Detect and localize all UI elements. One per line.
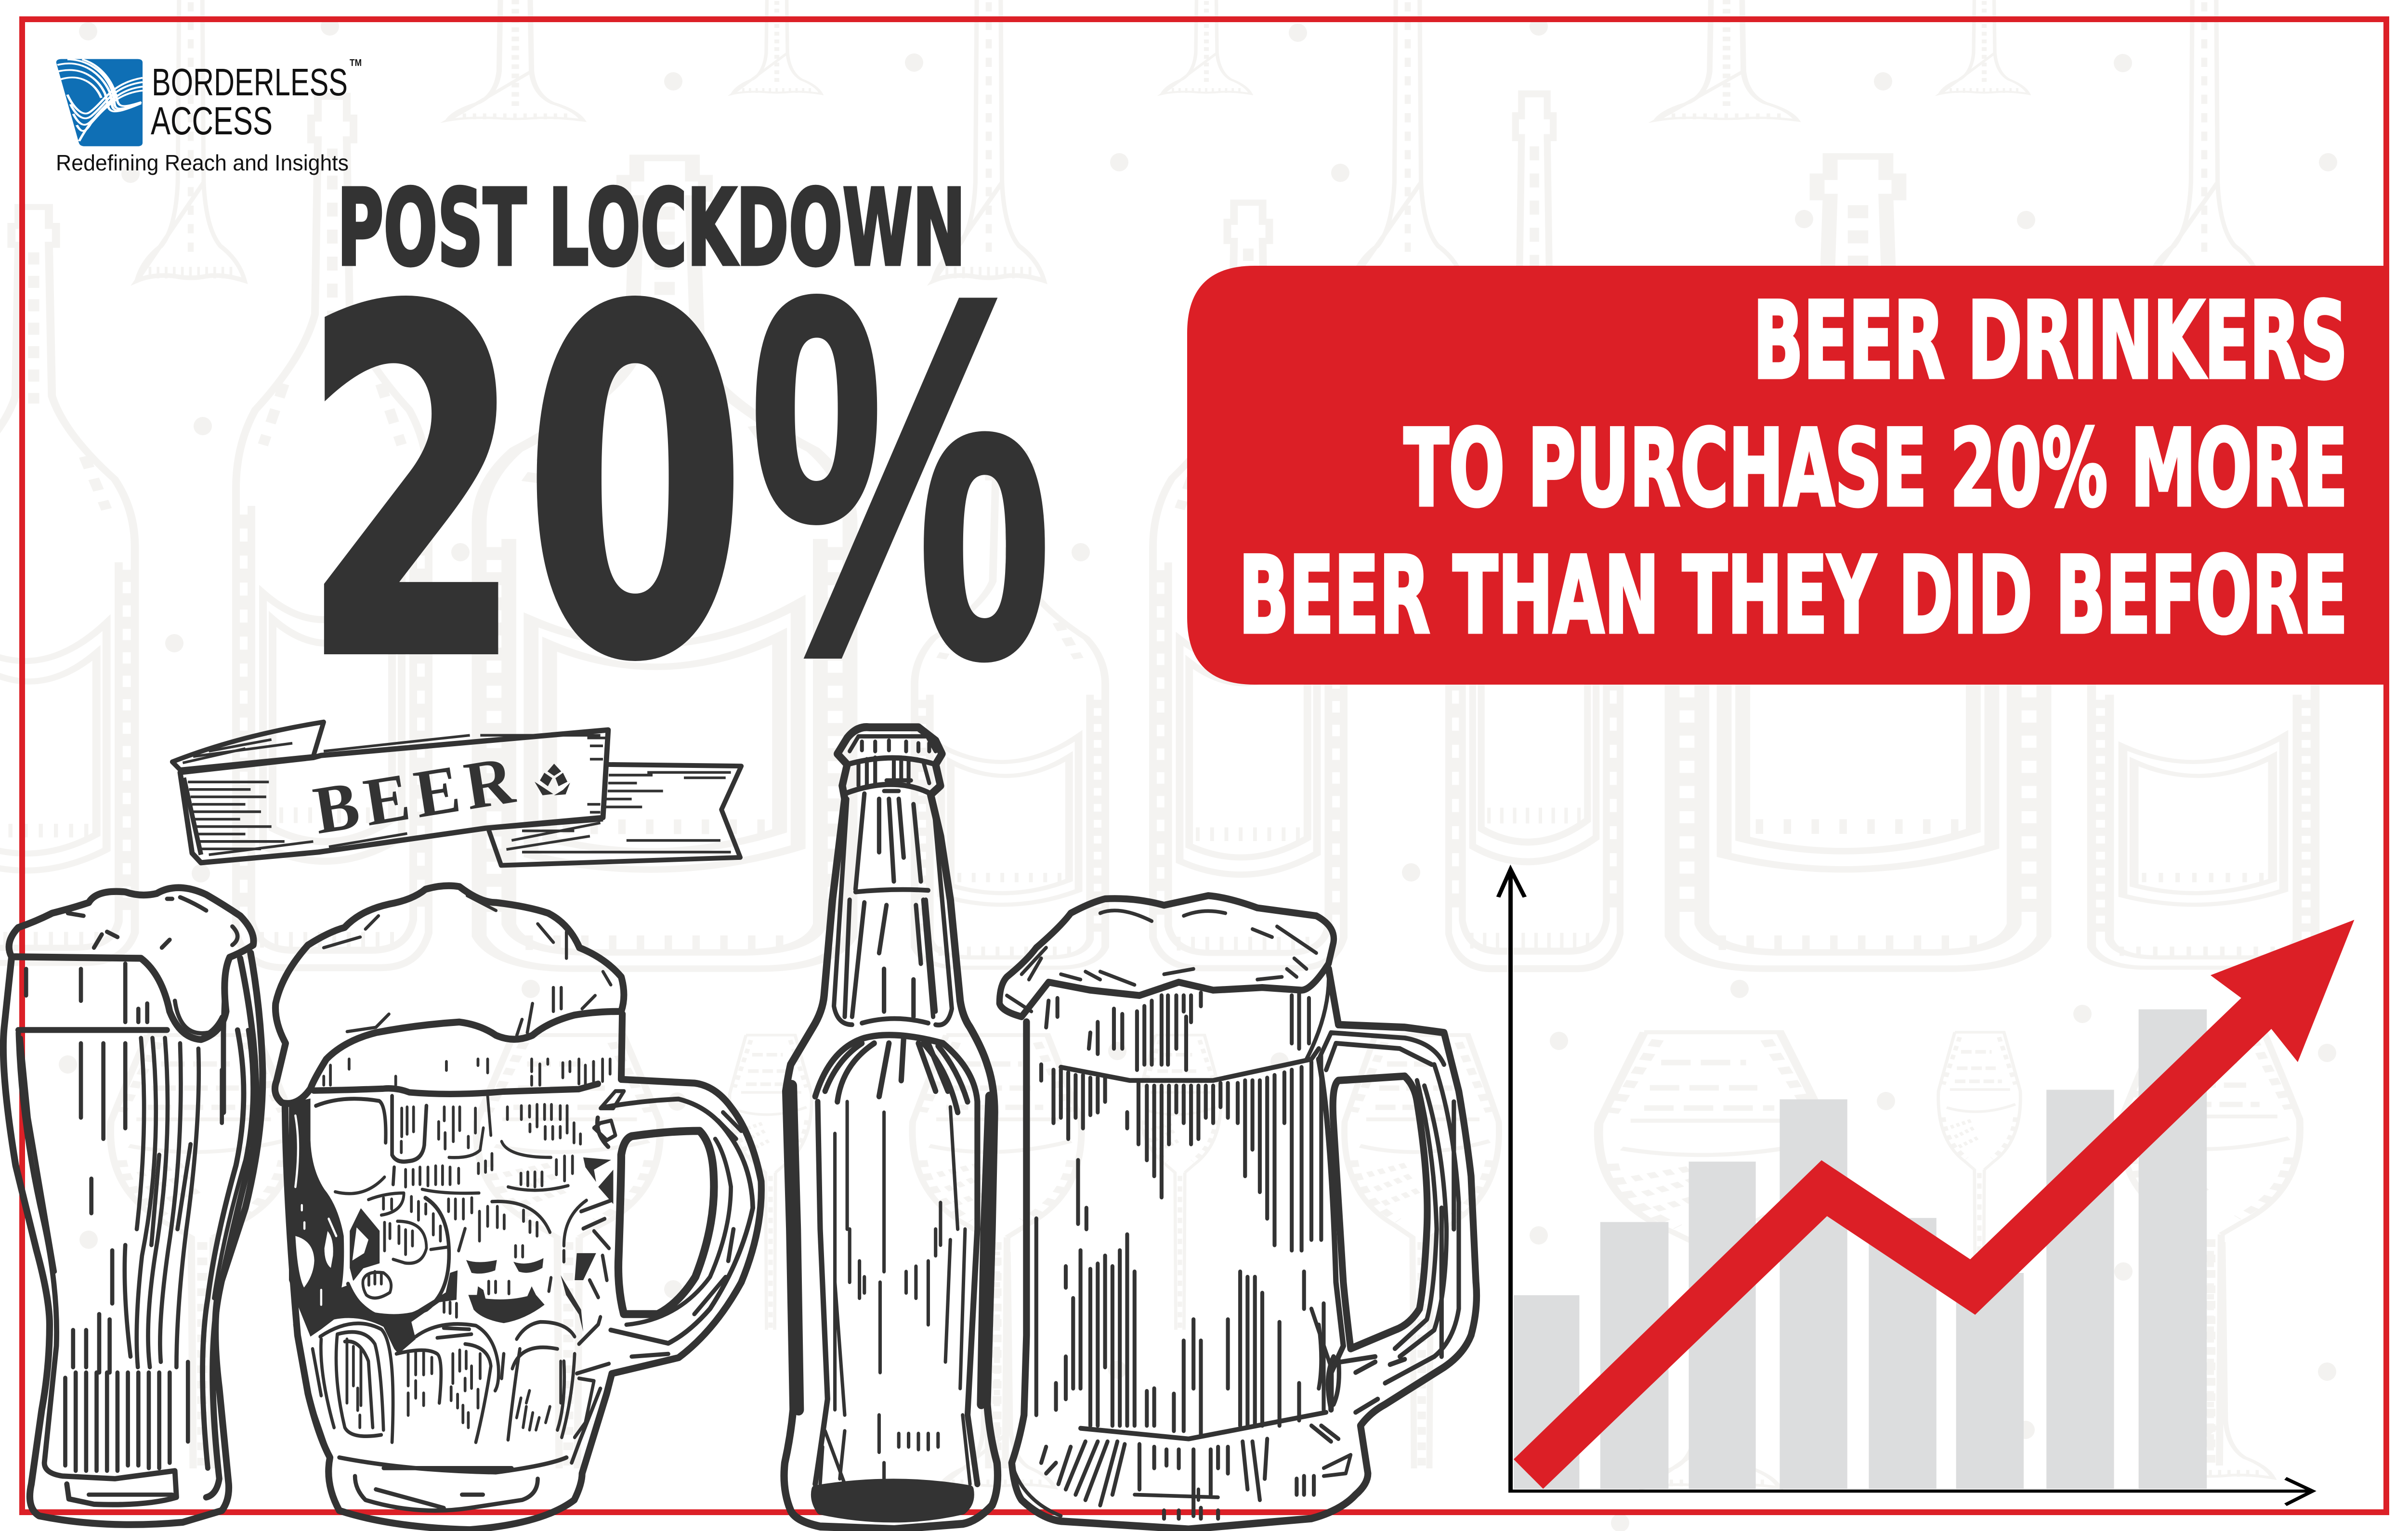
bar chart with axes and rising arrow: [1498, 869, 2354, 1505]
big number: 20%: 20: [301, 211, 746, 763]
text: BEER: BEER: [309, 742, 520, 849]
logo: Borderless Access: ACCESS: [151, 99, 273, 143]
illustration: beer bottle: [784, 727, 997, 1529]
logo: Borderless Access: [56, 58, 362, 175]
icon: blue wave square: [56, 59, 143, 146]
heading: POST LOCKDOWN: POST LOCKDOWN: [337, 168, 966, 289]
illustration: pilsner glass: [3, 888, 262, 1525]
axes: [1498, 869, 2313, 1505]
arrow: red trend: [1514, 920, 2354, 1489]
tagline: Redefining Reach and Insights: [56, 150, 349, 175]
illustration: dimpled beer mug: [275, 886, 761, 1530]
mug dimples and hatching: [289, 1059, 624, 1442]
bars: [1514, 1009, 2207, 1489]
trademark: TM: [350, 58, 362, 68]
banner ribbon with BEER: [172, 722, 741, 865]
illustration: beer stein: [999, 895, 1477, 1529]
mug outline: [275, 886, 761, 1530]
panel: red callout: [1187, 266, 2389, 685]
icon: hop: [535, 764, 570, 795]
big number: 20%: %: [749, 188, 1052, 766]
logo wordmark: BORDERLESS: [152, 61, 348, 104]
